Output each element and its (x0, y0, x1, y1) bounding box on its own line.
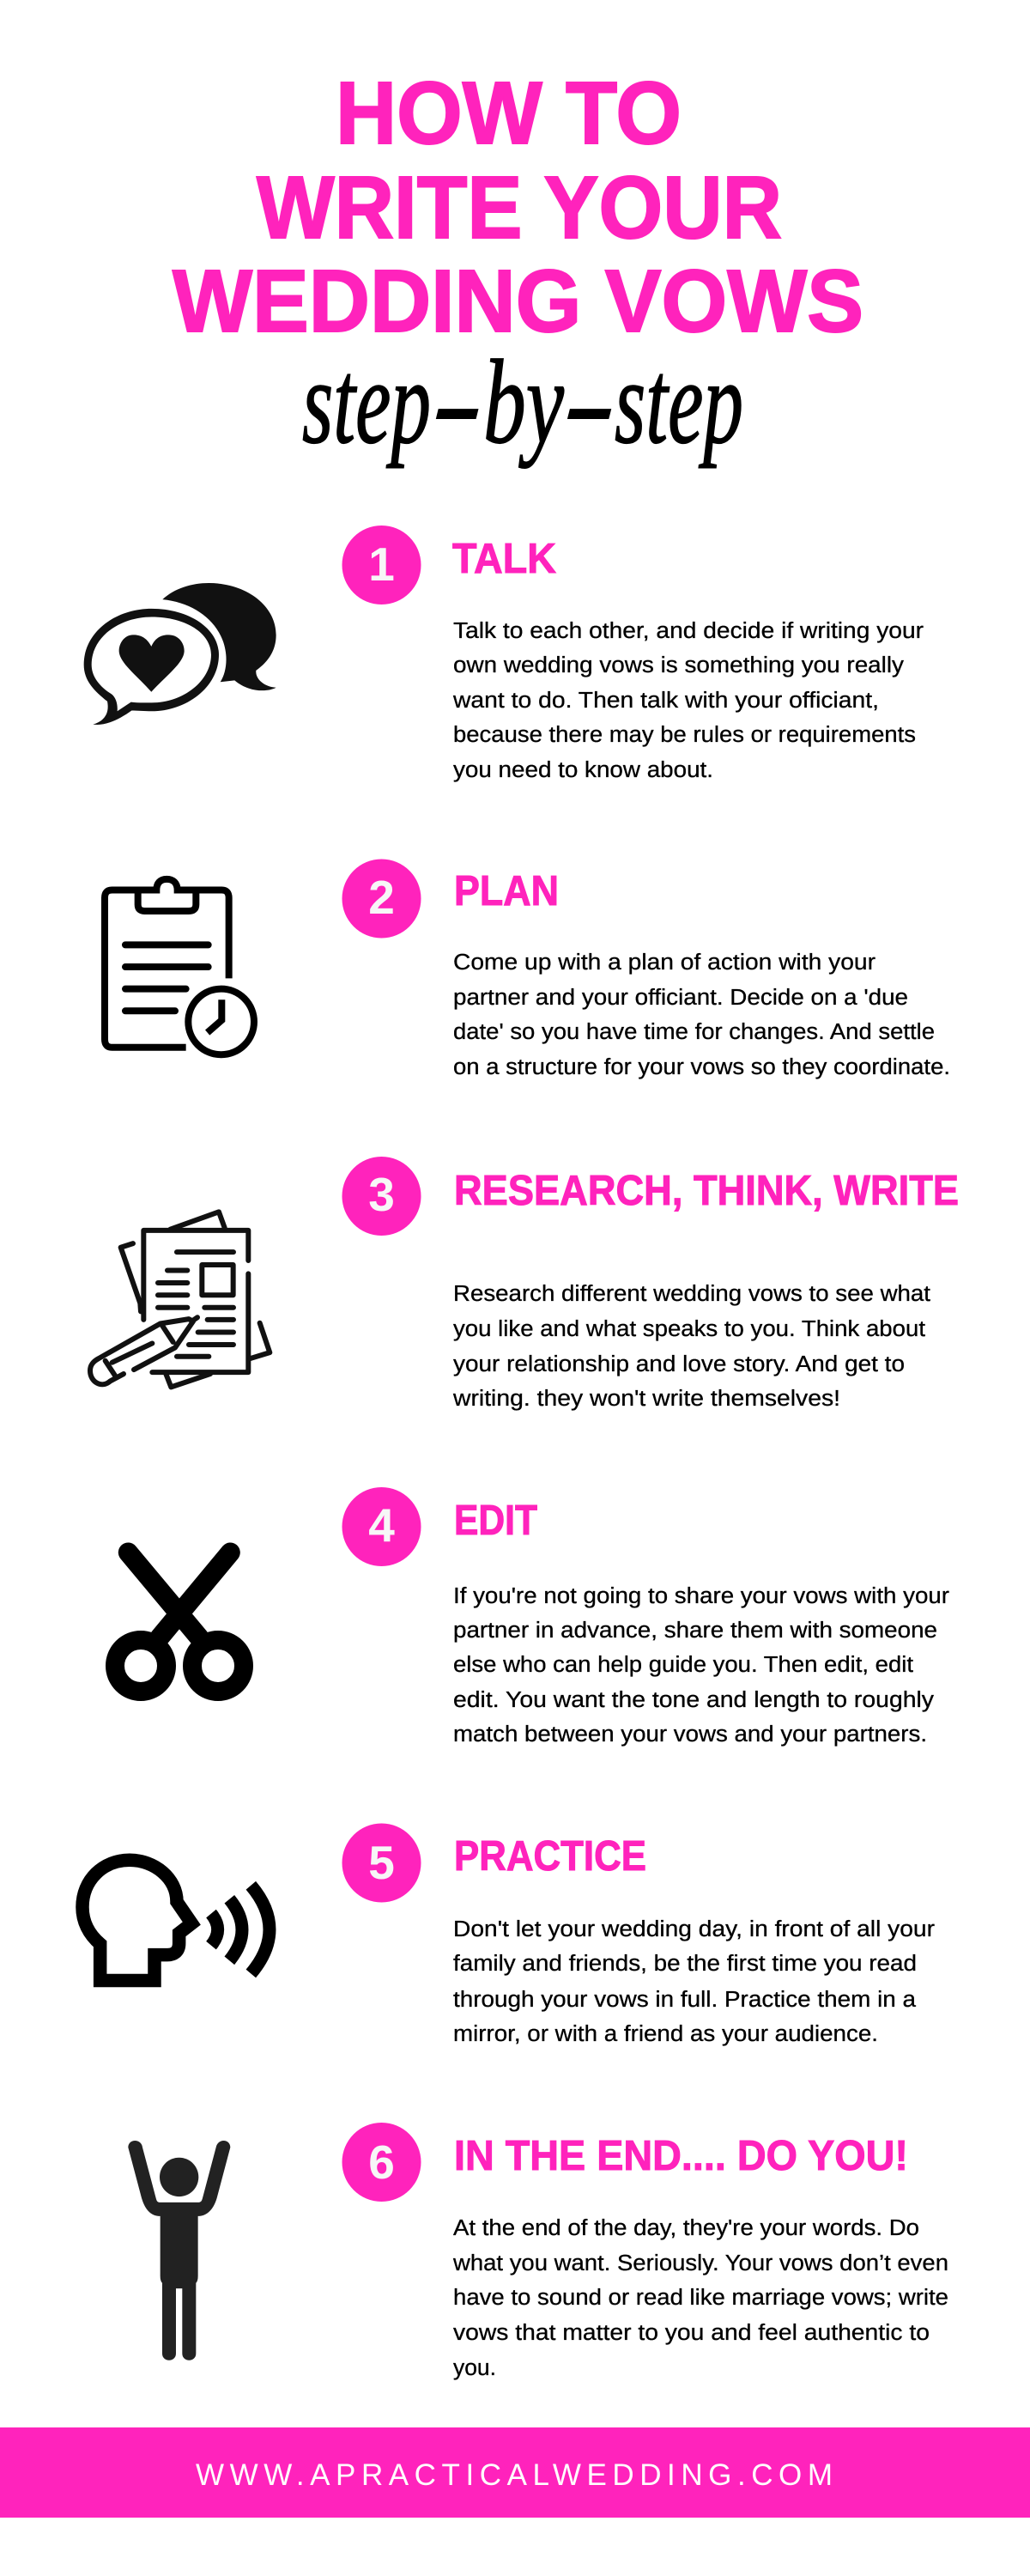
body text 3: your relationship and love story. And get to (453, 1352, 905, 1376)
heading: research, think, write: RESEARCH, THINK, WRITE (454, 1168, 959, 1214)
body text 1: Talk to each other, and decide if writing your (453, 619, 924, 643)
title: WRITE YOUR (257, 158, 782, 257)
panel: step 4 edit (115, 1487, 950, 1747)
body text 5: mirror, or with a friend as your audience. (453, 2022, 878, 2046)
body text 1: you need to know about. (453, 758, 713, 782)
body text 3 (452, 1282, 930, 1411)
body text 2: date' so you have time for changes. And settle (453, 1020, 935, 1044)
icon: document with pencil (90, 1212, 270, 1387)
icon: clipboard with clock (105, 879, 254, 1054)
heading: edit: EDIT (454, 1498, 537, 1544)
body text 4: else who can help guide you. Then edit, edit (453, 1653, 913, 1677)
subtitle: step-by-step: - (564, 336, 617, 469)
number badge 2 (342, 859, 421, 938)
heading: plan: PLAN (454, 868, 559, 914)
subtitle: step-by-step: - (433, 336, 484, 469)
body text 6: vows that matter to you and feel authentic to (453, 2321, 930, 2345)
body text 6: At the end of the day, they're your words. Do (453, 2216, 919, 2240)
number badge 4 (342, 1487, 421, 1566)
body text 6 (452, 2216, 948, 2380)
number badge 5: 5 (368, 1836, 395, 1889)
body text 4: match between your vows and your partners. (453, 1722, 927, 1747)
body text 2 (453, 951, 950, 1079)
icon: scissors (115, 1552, 244, 1692)
panel: step 2 plan (105, 859, 950, 1079)
title: HOW TO (336, 64, 682, 162)
icon: person with raised arms (128, 2141, 230, 2360)
body text 3: writing. they won't write themselves! (452, 1387, 840, 1411)
body text 2: Come up with a plan of action with your (453, 951, 876, 975)
title (173, 64, 863, 350)
body text 6: have to sound or read like marriage vows; write (453, 2286, 948, 2310)
panel: step 5 practice (82, 1824, 936, 2046)
number badge 3: 3 (368, 1168, 395, 1221)
body text 4: If you're not going to share your vows with your (453, 1584, 950, 1608)
body text 1: want to do. Then talk with your officiant, (452, 689, 879, 713)
number badge 1: 1 (368, 538, 395, 591)
subtitle: step-by-step (302, 336, 743, 469)
body text 6: you. (453, 2356, 496, 2380)
number badge 1 (342, 526, 421, 605)
panel: step 3 research, think, write (90, 1157, 959, 1411)
number badge 6: 6 (368, 2136, 395, 2189)
panel: step 6 in the end (128, 2123, 948, 2380)
body text 6: what you want. Seriously. Your vows don’t even (452, 2251, 948, 2275)
body text 2: partner and your officiant. Decide on a 'due (453, 986, 908, 1010)
icon: speech bubbles with heart (84, 583, 276, 725)
body text 5 (453, 1917, 936, 2046)
number badge 2: 2 (368, 871, 395, 924)
number badge 5 (342, 1824, 421, 1903)
subtitle: step-by-step: step (615, 336, 743, 469)
panel: step 1 talk (84, 526, 924, 782)
body text 5: Don't let your wedding day, in front of all your (453, 1917, 936, 1941)
subtitle: step-by-step: step (302, 336, 431, 469)
footer band (0, 2427, 1030, 2518)
title: WEDDING VOWS (173, 252, 863, 350)
body text 4: partner in advance, share them with someone (453, 1619, 937, 1643)
footer band: WWW.APRACTICALWEDDING.COM (196, 2458, 833, 2492)
body text 3: you like and what speaks to you. Think about (453, 1317, 925, 1341)
number badge 3 (342, 1157, 421, 1236)
body text 2: on a structure for your vows so they coordinate. (453, 1055, 950, 1079)
number badge 4: 4 (368, 1498, 395, 1552)
number badge 6 (342, 2123, 421, 2202)
body text 5: through your vows in full. Practice them in a (453, 1988, 917, 2012)
icon: speaking head (82, 1860, 270, 1980)
body text 3: Research different wedding vows to see what (453, 1282, 930, 1306)
body text 1 (452, 619, 924, 782)
body text 4 (453, 1584, 950, 1747)
subtitle: step-by-step: by (483, 336, 565, 469)
body text 5: family and friends, be the first time you read (453, 1952, 917, 1976)
heading: practice: PRACTICE (454, 1833, 646, 1880)
body text 1: own wedding vows is something you really (453, 653, 904, 677)
body text 4: edit. You want the tone and length to roughly (453, 1688, 934, 1712)
heading: talk: TALK (452, 536, 556, 582)
body text 1: because there may be rules or requirements (453, 723, 916, 747)
heading: in the end do you: IN THE END.... DO YOU! (454, 2133, 908, 2179)
